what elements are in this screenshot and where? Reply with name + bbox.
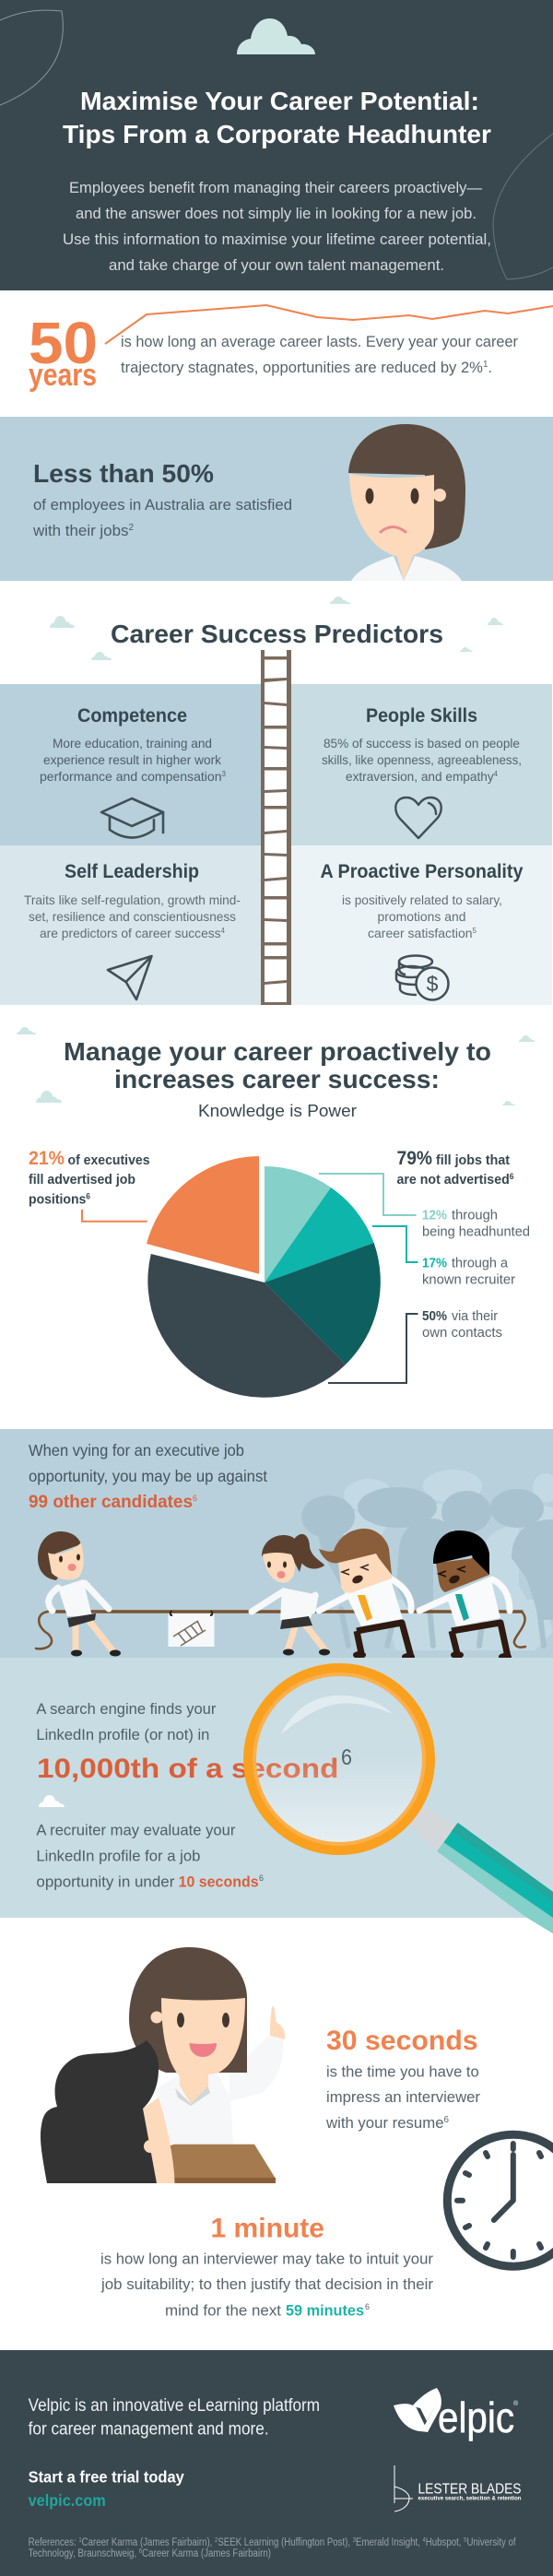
text block: references: Hubspot, xyxy=(426,2537,464,2548)
text block: recruiter: A recruiter may evaluate your xyxy=(36,1822,236,1839)
interviewee arm and shirt xyxy=(155,2036,284,2145)
interviewer seen from behind xyxy=(41,2040,175,2183)
title: Tips From a Corporate Headhunter xyxy=(63,120,491,148)
text block: 30 seconds: impress an interviewer xyxy=(326,2088,480,2106)
text block: 30 seconds: is the time you have to xyxy=(326,2062,479,2080)
panel: people skills: People Skills xyxy=(366,705,477,727)
text block: self leadership: Traits like self-regulation, growth mind- xyxy=(24,892,241,907)
text block: intro: Employees benefit from managing their careers proactively— xyxy=(69,179,482,196)
label: 79% fill jobs: fill jobs that xyxy=(436,1152,510,1168)
text block: people skills: 85% of success is based on people xyxy=(324,736,520,750)
text block: proactive personality: 5 xyxy=(473,927,477,935)
panel: competence xyxy=(0,684,261,845)
icon: white cloud xyxy=(39,1795,65,1807)
leader lines xyxy=(82,1174,418,1383)
label: 12% headhunted: 12% xyxy=(422,1208,447,1223)
heading: career success predictors xyxy=(50,597,503,660)
panel: proactive personality: A Proactive Personality xyxy=(321,861,524,882)
label: 12% headhunted: being headhunted xyxy=(422,1224,530,1240)
label: 12% headhunted: through xyxy=(452,1208,498,1223)
panel: people skills xyxy=(291,684,552,845)
text block: career length: 1 xyxy=(483,360,488,370)
text block: references: 2 xyxy=(215,2537,218,2544)
text block: competence: 3 xyxy=(222,770,227,778)
illustration: ladder sign xyxy=(168,1611,214,1647)
heading: career success predictors: Career Success Predictors xyxy=(111,620,443,648)
text block: references: SEEK Learning (Huffington Post), xyxy=(218,2537,353,2548)
label: 21% of executives: of executives xyxy=(68,1152,149,1168)
icon: coins xyxy=(396,955,448,999)
text block: references: Emerald Insight, xyxy=(356,2537,423,2548)
panel: search engine xyxy=(0,1658,553,1918)
heading: manage your career: Knowledge is Power xyxy=(198,1102,357,1120)
text block: search engine: LinkedIn profile (or not) in xyxy=(36,1726,209,1743)
text block: 1 minute: is how long an interviewer may take to intuit your xyxy=(100,2251,433,2268)
text block: career length: . xyxy=(488,359,492,376)
label: 50% contacts: 50% xyxy=(422,1308,447,1324)
panel: proactive personality xyxy=(291,845,552,1005)
text block: references: Career Karma (James Fairbairn) xyxy=(142,2548,271,2559)
label: 17% recruiter xyxy=(422,1256,515,1288)
text block: competence: performance and compensation xyxy=(40,769,221,784)
label: 50% contacts: own contacts xyxy=(422,1325,502,1341)
icon: ladder xyxy=(261,650,291,1005)
text block: self leadership xyxy=(24,892,241,940)
label: 21% of executives: positions xyxy=(29,1192,90,1208)
label: 79% fill jobs: 79% xyxy=(396,1148,432,1169)
text block: competence: experience result in higher work xyxy=(43,752,222,767)
text block: intro: and the answer does not simply lie in looking for a new job. xyxy=(76,205,477,222)
stat: 50 years: years xyxy=(29,358,97,393)
illustration: rope xyxy=(36,1612,525,1648)
text block: people skills: extraversion, and empathy xyxy=(346,769,498,784)
text block: candidates xyxy=(29,1441,267,1512)
desk xyxy=(47,2145,276,2183)
icon: coins: $ xyxy=(427,972,439,996)
text block: recruiter xyxy=(36,1822,264,1891)
label: 21% of executives: fill advertised job xyxy=(29,1172,135,1188)
heading: manage your career: increases career success: xyxy=(114,1065,440,1093)
text block: satisfaction: of employees in Australia are satisfied xyxy=(33,496,292,514)
label: 79% fill jobs: 6 xyxy=(510,1172,514,1181)
stat: 10,000th of a second: 6 xyxy=(341,1745,352,1770)
illustration: woman with ponytail xyxy=(252,1534,330,1656)
stat: 10,000th of a second: 10,000th of a second xyxy=(37,1754,338,1784)
text block: career length: is how long an average career lasts. Every year your career xyxy=(121,333,518,350)
call to action: velpic.com xyxy=(29,2491,106,2510)
text block: 30 seconds: 6 xyxy=(444,2115,449,2125)
panel: footer xyxy=(0,2350,553,2576)
illustration: interview xyxy=(41,1947,285,2183)
panel: self leadership xyxy=(0,845,261,1005)
stat: 10,000th of a second xyxy=(37,1745,352,1784)
logo: velpic xyxy=(394,2388,519,2441)
pie chart xyxy=(82,1156,418,1398)
text block: references: Career Karma (James Fairbairn), xyxy=(82,2537,215,2548)
text block: candidates: 6 xyxy=(193,1494,197,1503)
icon: magnifying glass xyxy=(249,1669,553,1933)
logo: lester blades xyxy=(394,2465,522,2511)
text block: proactive personality: is positively related to salary, xyxy=(342,892,502,907)
text block: 30 seconds: 30 seconds xyxy=(326,2026,478,2056)
label: 79% fill jobs: are not advertised xyxy=(396,1172,516,1188)
panel: 50 years xyxy=(29,305,553,393)
text block: satisfaction xyxy=(32,496,292,539)
text block: references: Technology, Braunschweig, xyxy=(29,2548,157,2559)
text block: intro: and take charge of your own talent management. xyxy=(109,256,444,274)
icon: cloud xyxy=(237,18,315,54)
illustration: unhappy woman xyxy=(348,424,465,581)
illustration: crowd silhouettes xyxy=(301,1470,553,1650)
label: 50% contacts: via their xyxy=(452,1308,498,1324)
text block: 1 minute: 6 xyxy=(365,2302,370,2311)
text block: people skills xyxy=(322,736,522,784)
text block: recruiter: opportunity in under xyxy=(36,1873,175,1891)
text block: references xyxy=(29,2537,516,2559)
text block: 1 minute xyxy=(100,2214,433,2320)
text block: candidates: When vying for an executive job xyxy=(29,1441,244,1459)
text block: 1 minute: mind for the next xyxy=(165,2302,281,2320)
label: 17% recruiter: known recruiter xyxy=(422,1272,515,1288)
text block: self leadership: are predictors of career success xyxy=(40,926,223,940)
text block: velpic intro: for career management and more. xyxy=(29,2420,269,2440)
text block: candidates: opportunity, you may be up against xyxy=(29,1467,267,1485)
text block: 30 seconds xyxy=(325,2026,480,2132)
text block: satisfaction: with their jobs xyxy=(33,522,129,539)
text block: people skills: skills, like openness, agreeableness, xyxy=(322,752,522,767)
icon: clock xyxy=(447,2134,553,2266)
text block: 1 minute: 59 minutes xyxy=(286,2302,364,2320)
text block: recruiter: LinkedIn profile for a job xyxy=(36,1848,200,1865)
text block: self leadership: set, resilience and conscientiousness xyxy=(29,909,236,924)
label: 12% headhunted xyxy=(422,1208,530,1240)
text block: career length: trajectory stagnates, opportunities are reduced by 2% xyxy=(121,359,492,376)
text block: references: 6 xyxy=(139,2548,142,2555)
illustration: man with orange tie xyxy=(319,1529,415,1660)
text block: recruiter: 10 seconds xyxy=(179,1873,259,1891)
text block: references: 5 xyxy=(464,2537,467,2544)
text block: search engine xyxy=(36,1700,217,1743)
title: Maximise Your Career Potential: xyxy=(80,87,479,115)
text block: references: 1 xyxy=(78,2537,82,2544)
stat: 50 years: 50 xyxy=(29,310,98,376)
text block: references: 3 xyxy=(353,2537,356,2544)
label: 21% of executives: 21% xyxy=(29,1148,65,1169)
text block: references: University of xyxy=(466,2537,516,2548)
text block: competence: More education, training and xyxy=(53,736,212,750)
icon: heart xyxy=(395,798,441,838)
label: 17% recruiter: through a xyxy=(452,1256,509,1271)
label: 50% contacts xyxy=(422,1308,502,1341)
text block: people skills: 4 xyxy=(494,770,499,778)
text block: proactive personality xyxy=(342,892,502,940)
text block: self leadership: 4 xyxy=(221,927,226,935)
icon: paper plane xyxy=(108,956,151,999)
panel: tug of war xyxy=(0,1429,553,1660)
panel: header xyxy=(0,0,553,290)
chart line: career trajectory xyxy=(105,305,553,344)
text block: 1 minute: 1 minute xyxy=(210,2214,324,2244)
label: 17% recruiter: 17% xyxy=(422,1256,447,1271)
text block: intro xyxy=(63,179,491,274)
text block: search engine: A search engine finds your xyxy=(36,1700,217,1718)
logo: velpic: ® xyxy=(513,2400,519,2407)
logo: lester blades: executive search, selection & retention xyxy=(418,2496,522,2502)
call to action xyxy=(29,2468,184,2510)
stat heading: Less than 50% xyxy=(33,459,214,488)
panel: less than 50% xyxy=(0,417,553,581)
panel: competence: Competence xyxy=(77,705,187,727)
text block: competence xyxy=(40,736,227,784)
label: 21% of executives xyxy=(29,1148,149,1208)
title xyxy=(63,87,491,148)
text block: 1 minute: job suitability; to then justify that decision in their xyxy=(100,2275,433,2293)
illustration: woman pulling left xyxy=(38,1531,121,1656)
call to action: Start a free trial today xyxy=(29,2468,184,2487)
text block: references: References: xyxy=(29,2537,86,2548)
interviewee hand xyxy=(270,2006,285,2039)
text block: career length xyxy=(121,333,518,376)
illustration: man with teal tie xyxy=(419,1530,512,1660)
icon: graduation cap xyxy=(101,798,163,837)
heading: manage your career xyxy=(17,1027,535,1120)
label: 79% fill jobs xyxy=(396,1148,514,1188)
text block: candidates: 99 other candidates xyxy=(29,1493,193,1512)
label: 21% of executives: 6 xyxy=(86,1192,90,1201)
panel: self leadership: Self Leadership xyxy=(65,861,199,882)
text block: satisfaction: 2 xyxy=(128,523,134,533)
logo: lester blades: LESTER BLADES xyxy=(418,2481,522,2497)
logo: velpic: elpic xyxy=(438,2393,514,2441)
text block: intro: Use this information to maximise your lifetime career potential, xyxy=(63,230,491,248)
text block: references: 4 xyxy=(423,2537,426,2544)
text block: velpic intro: Velpic is an innovative eLearning platform xyxy=(29,2396,320,2416)
text block: 30 seconds: with your resume xyxy=(326,2114,445,2132)
text block: velpic intro xyxy=(29,2396,320,2440)
text block: proactive personality: career satisfaction xyxy=(368,926,473,940)
interviewee hair and face xyxy=(129,1947,247,2104)
heading: manage your career: Manage your career proactively to xyxy=(64,1037,491,1066)
text block: recruiter: 6 xyxy=(259,1873,264,1883)
text block: proactive personality: promotions and xyxy=(378,909,466,924)
